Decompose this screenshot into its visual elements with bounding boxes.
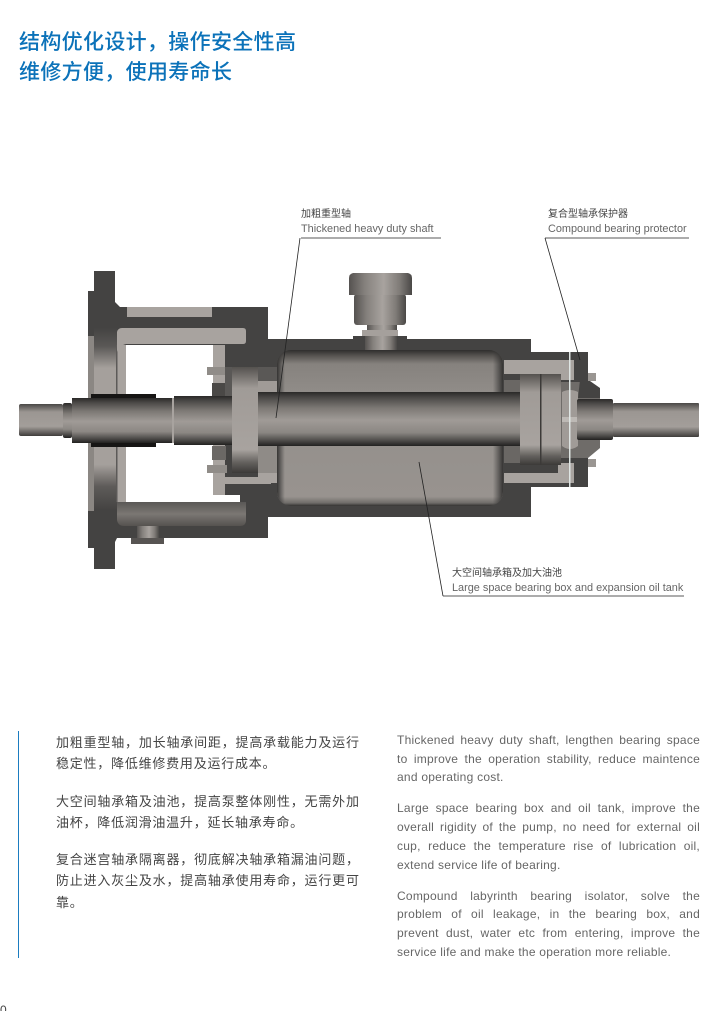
chinese description: 加粗重型轴，加长轴承间距，提高承载能力及运行 xyxy=(56,735,359,750)
chinese description: 大空间轴承箱及油池，提高泵整体刚性，无需外加 xyxy=(56,794,359,809)
bottom drain plug xyxy=(131,526,164,544)
callout: oil tank xyxy=(452,567,684,594)
chinese description: 复合迷宫轴承隔离器，彻底解决轴承箱漏油问题， xyxy=(56,852,359,867)
right bearing seat and labyrinth xyxy=(504,352,600,487)
pump housing xyxy=(88,271,588,569)
english description: problem of oil leakage, in the bearing box, and xyxy=(397,907,700,921)
chinese description: 稳定性，降低维修费用及运行成本。 xyxy=(56,756,276,771)
lower casing rib xyxy=(117,502,246,526)
chinese description: 靠。 xyxy=(56,895,84,910)
title: 结构优化设计，操作安全性高 xyxy=(19,31,296,54)
english description: and operating cost. xyxy=(397,770,504,784)
seal parts left xyxy=(207,345,271,495)
callout: shaft xyxy=(301,208,434,235)
left bearing seat xyxy=(232,367,277,483)
upper casing rib xyxy=(117,328,246,352)
callout: bearing protector: 复合型轴承保护器 xyxy=(548,209,628,220)
callout: bearing protector xyxy=(548,208,687,235)
english description: Thickened heavy duty shaft, lengthen bearing space xyxy=(397,733,700,747)
window openings xyxy=(126,345,240,502)
leader lines xyxy=(276,238,689,596)
breather cap xyxy=(349,273,412,350)
chinese description xyxy=(56,735,359,910)
english description xyxy=(397,733,700,959)
callout: oil tank: Large space bearing box and expansion oil tank xyxy=(452,582,683,594)
english description: overall rigidity of the pump, no need for external oil xyxy=(397,820,700,834)
title xyxy=(19,30,296,84)
english description: Compound labyrinth bearing isolator, solve the xyxy=(397,889,700,903)
chinese description: 防止进入灰尘及水，提高轴承使用寿命，运行更可 xyxy=(56,873,359,888)
main shaft xyxy=(19,392,699,447)
callout: bearing protector: Compound bearing protector xyxy=(548,223,687,235)
english description: to improve the operation stability, reduce maintence xyxy=(397,752,700,766)
oil tank xyxy=(277,350,503,506)
english description: prevent dust, water etc from entering, improve the xyxy=(397,926,700,940)
english description: service life and make the operation more reliable. xyxy=(397,945,671,959)
flange face xyxy=(88,328,126,511)
blue side rule xyxy=(18,731,19,958)
english description: extend service life of bearing. xyxy=(397,858,561,872)
callout: oil tank: 大空间轴承箱及加大油池 xyxy=(452,568,562,579)
title: 维修方便，使用寿命长 xyxy=(19,61,232,84)
english description: cup, reduce the temperature rise of lubrication oil, xyxy=(397,839,700,853)
chinese description: 油杯，降低润滑油温升，延长轴承寿命。 xyxy=(56,815,304,830)
callout: shaft: Thickened heavy duty shaft xyxy=(301,223,434,235)
callout: shaft: 加粗重型轴 xyxy=(301,209,351,220)
english description: Large space bearing box and oil tank, improve the xyxy=(397,801,700,815)
